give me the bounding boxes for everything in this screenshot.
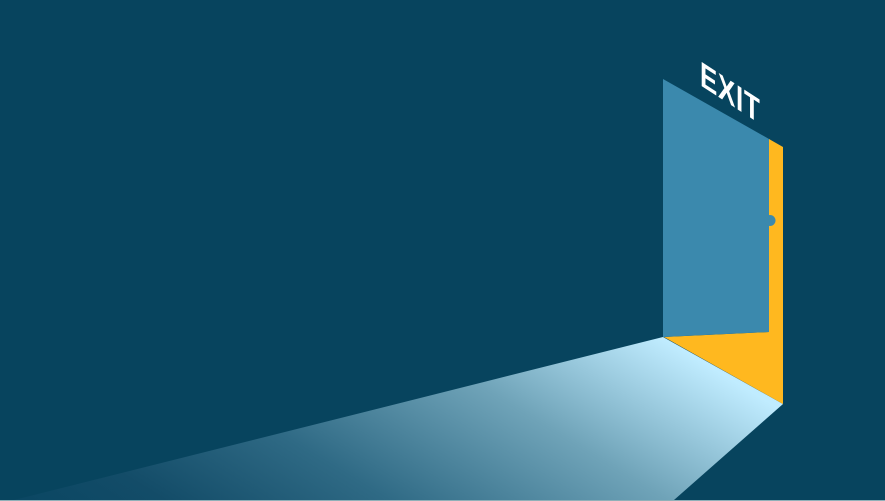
- floor edge line: [0, 500, 885, 501]
- light beam on floor: [14, 337, 783, 500]
- door panel: [663, 79, 776, 337]
- exit sign text: EXIT: [700, 53, 761, 132]
- icon: door knob: [764, 215, 776, 226]
- door frame: yellow opening: [664, 139, 783, 404]
